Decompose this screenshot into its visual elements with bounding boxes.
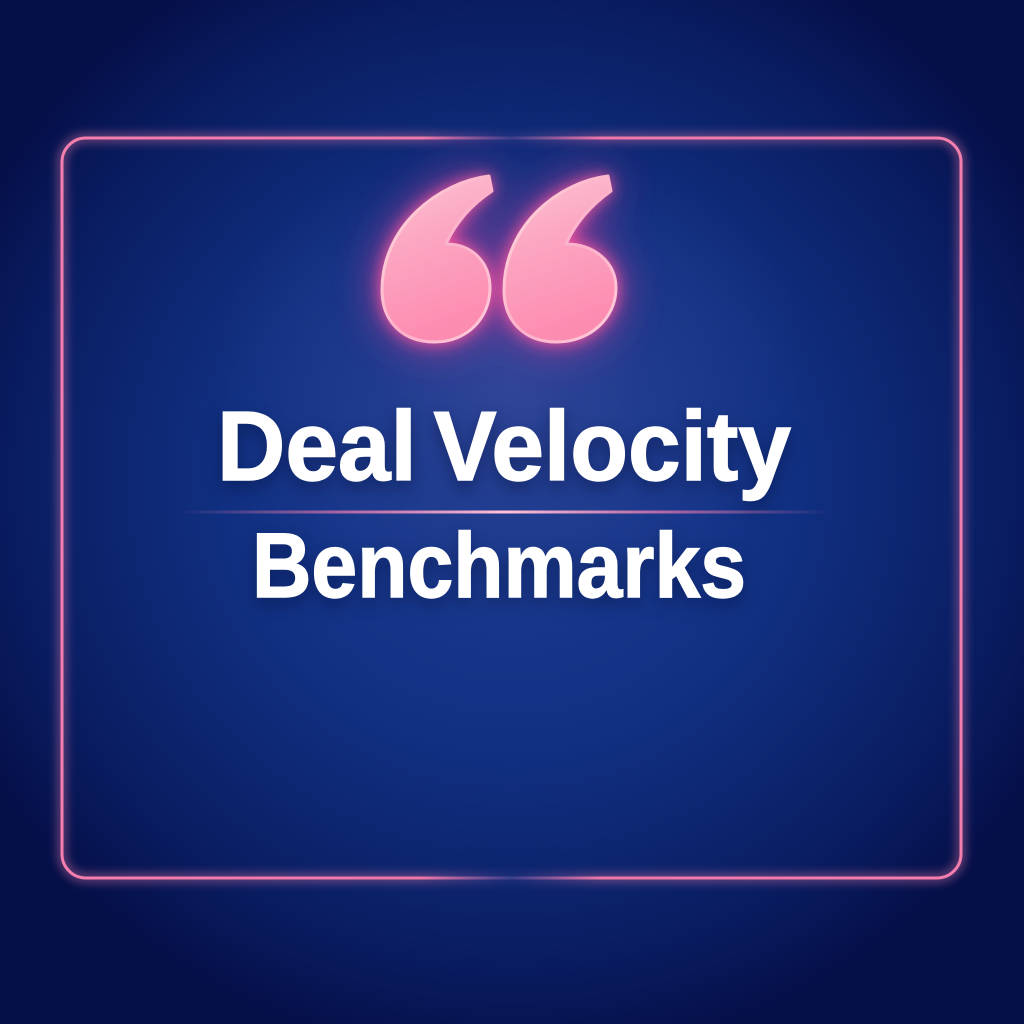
heading: line one: Deal Velocity	[217, 391, 791, 501]
heading: line two: Benchmarks	[252, 515, 746, 617]
central background glow	[212, 130, 812, 630]
divider line	[188, 510, 822, 514]
